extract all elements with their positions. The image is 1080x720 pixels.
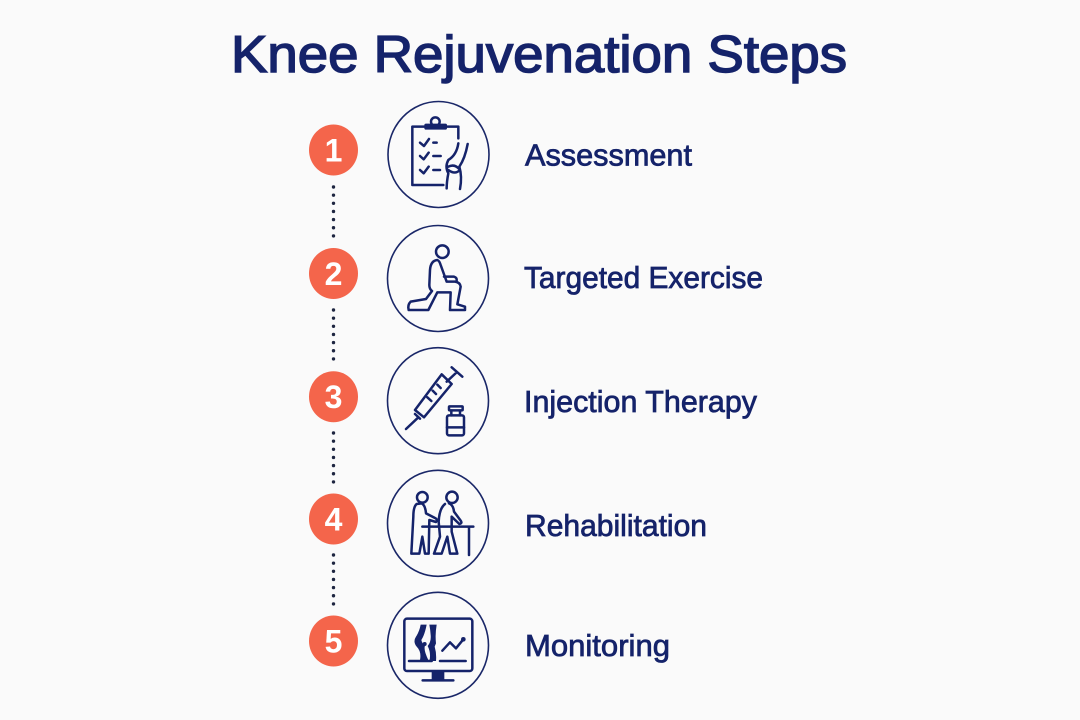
connector: step 4 to 5 — [332, 555, 335, 604]
number badge 5 — [309, 616, 358, 666]
step 4: rehabilitation — [309, 470, 707, 576]
label: targeted exercise: Targeted Exercise — [524, 260, 763, 295]
icon: syringe and vial — [388, 348, 488, 454]
step 1: assessment — [309, 102, 692, 208]
label: assessment: Assessment — [525, 138, 692, 172]
icon: monitor with knee scan — [388, 592, 488, 698]
connector: step 3 to 4 — [332, 433, 335, 482]
label: injection therapy: Injection Therapy — [524, 384, 757, 419]
number badge 1: 1 — [325, 132, 342, 168]
step 5: monitoring — [309, 592, 670, 698]
connector: step 1 to 2 — [332, 187, 335, 237]
icon: clipboard and knee — [388, 102, 489, 208]
number badge 3 — [309, 371, 358, 422]
step 3: injection therapy — [309, 348, 757, 454]
icon: therapist and patient at table — [388, 470, 488, 576]
number badge 5: 5 — [325, 624, 342, 660]
title: Knee Rejuvenation Steps — [231, 26, 847, 84]
number badge 4 — [309, 494, 358, 544]
number badge 3: 3 — [325, 379, 342, 415]
number badge 4: 4 — [325, 502, 343, 538]
connector: step 2 to 3 — [332, 310, 335, 359]
label: monitoring: Monitoring — [525, 628, 670, 663]
icon: lunge exercise — [388, 226, 488, 332]
number badge 1 — [309, 124, 358, 176]
label: rehabilitation: Rehabilitation — [525, 508, 707, 543]
number badge 2 — [309, 248, 358, 299]
number badge 2: 2 — [325, 256, 342, 292]
step 2: targeted exercise — [309, 226, 763, 332]
